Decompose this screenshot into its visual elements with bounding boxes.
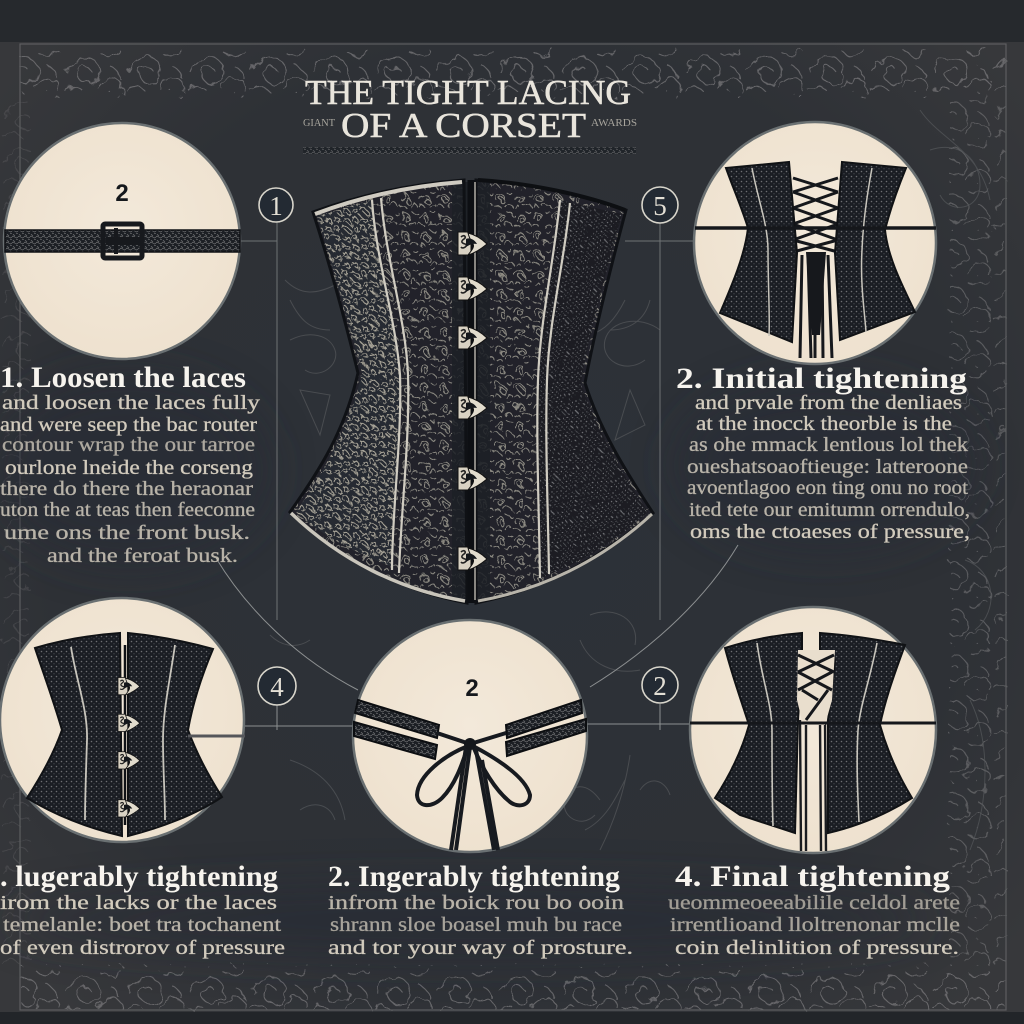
panel: step circle bottom right (690, 607, 936, 853)
panel: step circle bottom left (0, 598, 245, 842)
corset bottom trim (291, 513, 465, 601)
corset left panel (720, 162, 797, 342)
belt buckle (103, 224, 142, 258)
title block (303, 73, 637, 154)
text block: step 5 (668, 860, 960, 959)
corset right half (478, 182, 651, 600)
body: ueommeoeeabilile celdol arete (668, 892, 960, 914)
lace window (797, 650, 835, 725)
centre opening (468, 180, 474, 603)
right side panel (538, 200, 647, 578)
boning (71, 645, 175, 820)
bow (417, 733, 530, 850)
body: coin delinlition of pressure. (675, 937, 959, 959)
body: irrentlioand lloltrenonar mclle (670, 914, 960, 936)
body (328, 892, 633, 959)
number badge 1 (259, 188, 293, 222)
boning (757, 643, 877, 826)
body: and tor your way of prosture. (328, 937, 633, 959)
corset left panel (715, 633, 802, 833)
heading: 1. Loosen the laces (0, 361, 246, 394)
text shadow panels (0, 375, 975, 954)
title line two: OF A CORSET (341, 106, 586, 145)
body: avoentlagoo eon ting onu no root (687, 477, 968, 499)
title flourish right: AWARDS (591, 118, 637, 129)
circle (694, 122, 936, 364)
circle (0, 598, 244, 842)
left side panel (296, 200, 400, 566)
text block: step 2 (676, 362, 970, 543)
heading: . lugerably tightening (0, 860, 278, 893)
faint floral ornaments (270, 110, 991, 850)
panel: step circle top left (4, 123, 240, 359)
corset right half (128, 633, 222, 836)
heading: 2. Ingerably tightening (328, 860, 620, 893)
circle (4, 123, 240, 359)
body: irom the lacks or the laces (0, 892, 277, 914)
body: and loosen the laces fully (2, 392, 260, 414)
hooks (118, 678, 140, 817)
body: ourlone lneide the corseng (5, 457, 253, 479)
corset right panel (820, 633, 912, 833)
body: shrann sloe boasel muh bu race (330, 914, 622, 936)
circle (690, 607, 936, 853)
boning stripes (372, 198, 570, 578)
heading: 4. Final tightening (675, 860, 950, 893)
text block: step 4 (328, 860, 633, 959)
connector lines (216, 222, 738, 730)
body: and the feroat busk. (47, 545, 238, 567)
title: THE TIGHT LACING (305, 73, 631, 112)
body (0, 892, 285, 959)
outer top margin (0, 0, 1024, 42)
knot (464, 738, 476, 750)
corset left half (27, 633, 122, 836)
number two: 2 (465, 675, 479, 702)
lacing (798, 655, 834, 720)
title flourish left: GIANT (303, 118, 335, 129)
number badge 2: 2 (653, 671, 667, 701)
body: at the inocck theorble is the (696, 413, 952, 435)
body: contour wrap the our tarroe (2, 434, 255, 456)
circle (353, 620, 587, 852)
boning (752, 168, 872, 336)
belt strap (5, 230, 240, 252)
waist line (188, 734, 245, 738)
body (668, 892, 960, 959)
centre placket (452, 182, 490, 601)
number badge 2 (642, 667, 678, 703)
body: oueshatsoaoftieuge: latteroone (687, 456, 968, 478)
number badge 1: 1 (269, 191, 283, 221)
body: infrom the boick rou bo ooin (328, 892, 624, 914)
right straps (506, 700, 586, 756)
panel: step circle bottom middle (353, 620, 587, 852)
title subtitle rule (303, 147, 636, 154)
busk hooks (458, 232, 487, 570)
body: as ohe mmack lentlous lol thek (689, 434, 968, 456)
body: ited tete our emitumn orrendulo, (689, 499, 970, 521)
body: of even distrorov of pressure (0, 937, 285, 959)
corset right panel (835, 162, 915, 340)
waist line (695, 226, 936, 230)
text block: step 1 (0, 361, 260, 567)
body: there do there the heraonar (0, 478, 253, 500)
body: uton the at teas then feeconne (0, 499, 255, 521)
number badge 4: 4 (270, 672, 284, 702)
back lacing (793, 178, 838, 252)
body: ume ons the front busk. (4, 522, 250, 544)
number badge 4 (258, 667, 296, 705)
centre seam (124, 645, 126, 825)
body: temelanle: boet tra tochanent (3, 914, 282, 936)
body: and prvale from the denliaes (695, 392, 962, 414)
number badge 5: 5 (653, 191, 667, 221)
corset outline (290, 180, 653, 603)
body: oms the ctoaeses of pressure, (690, 521, 970, 543)
main corset (280, 170, 665, 615)
panel: step circle top right (694, 122, 936, 364)
body (0, 392, 260, 567)
heading: 2. Initial tightening (676, 362, 967, 395)
hanging lace ends (800, 252, 832, 358)
left straps (354, 700, 439, 759)
corset top trim (315, 182, 462, 214)
hanging laces (800, 720, 826, 851)
body (687, 392, 970, 543)
number badge 5 (642, 187, 678, 223)
text block: step 3 (0, 860, 285, 959)
number two: 2 (115, 180, 129, 207)
corset left half (292, 182, 466, 602)
body: and were seep the bac router (0, 414, 257, 436)
waist line (690, 722, 936, 724)
